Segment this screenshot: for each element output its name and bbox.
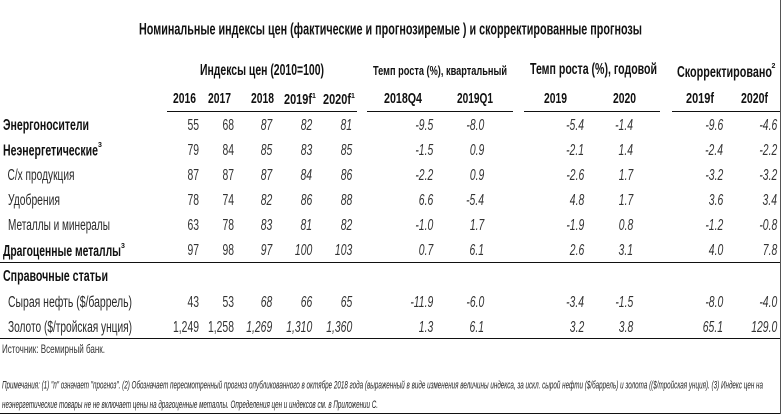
- row: Удобрения: -5.4: [466, 191, 484, 209]
- row: Удобрения: 3.4: [763, 191, 777, 209]
- row: Удобрения: 82: [261, 191, 273, 209]
- row: Неэнергетические: -2.1: [566, 141, 584, 159]
- row: Золото: 65.1: [703, 318, 723, 336]
- column year headers: 2019f: [284, 91, 313, 108]
- row: Удобрения: 74: [222, 191, 234, 209]
- row: Золото: Золото ($/тройская унция): [8, 319, 132, 336]
- row: Металлы и минералы: 83: [261, 216, 273, 234]
- row: Золото: 1,360: [326, 318, 353, 336]
- row: Драгоценные металлы: 103: [335, 241, 353, 259]
- row: С/х продукция: 1.7: [619, 166, 634, 184]
- right border: [780, 0, 781, 414]
- column year headers: 2020f: [741, 90, 769, 107]
- section heading: Справочные статьи: Справочные статьи: [3, 268, 108, 285]
- row: Драгоценные металлы: 6.1: [470, 241, 484, 259]
- column group headings: 2: [772, 63, 776, 70]
- row: Золото: 3.2: [570, 318, 585, 336]
- column year headers: [173, 90, 769, 108]
- row: Драгоценные металлы: 3.1: [619, 241, 633, 259]
- row: Сырая нефть: [8, 293, 778, 311]
- column year headers: 2019f: [686, 90, 715, 107]
- row: Золото: 1,269: [246, 318, 273, 336]
- row: Удобрения: 4.8: [570, 191, 585, 209]
- row: Металлы и минералы: -1.2: [705, 216, 724, 234]
- header rules: [167, 110, 781, 112]
- row: Удобрения: 86: [301, 191, 313, 209]
- row: Неэнергетические: 3: [98, 142, 102, 149]
- row: Удобрения: 78: [187, 191, 199, 209]
- row: Металлы и минералы: -1.9: [566, 216, 585, 234]
- column year headers: 2020f: [323, 91, 352, 108]
- column group headings: Темп роста (%), квартальный: [373, 63, 507, 78]
- row: Золото: 1,258: [208, 318, 234, 336]
- row: Неэнергетические: 0.9: [470, 141, 485, 159]
- row: Энергоносители: -4.6: [759, 116, 778, 134]
- table bottom rule: [0, 338, 781, 340]
- column year headers: 2019Q1: [457, 90, 493, 107]
- row: Энергоносители: -5.4: [566, 116, 584, 134]
- row: Металлы и минералы: Металлы и минералы: [8, 217, 110, 234]
- row: Драгоценные металлы: 100: [295, 241, 313, 259]
- row: Удобрения: Удобрения: [8, 192, 60, 209]
- column year headers: 1: [351, 93, 355, 100]
- row: Энергоносители: -9.6: [705, 116, 724, 134]
- source: Источник: Всемирный банк.: [2, 342, 105, 356]
- row: Драгоценные металлы: 2.6: [569, 241, 585, 259]
- section rule: [0, 262, 781, 264]
- row: С/х продукция: 87: [187, 166, 199, 184]
- row: Сырая нефть: Сырая нефть ($/баррель): [8, 294, 132, 311]
- footnotes: неэнергетические товары не не включает цены на драгоценные металлы. Определения цен и индексов см. в Приложении С.: [2, 399, 378, 411]
- column group headings: Темп роста (%), годовой: [530, 61, 657, 78]
- row: С/х продукция: -3.2: [705, 166, 724, 184]
- column year headers: 2017: [208, 90, 231, 107]
- row: Неэнергетические: [3, 141, 778, 160]
- row: С/х продукция: 84: [300, 166, 312, 184]
- row: Металлы и минералы: -1.0: [415, 216, 434, 234]
- row: Неэнергетические: 85: [261, 141, 273, 159]
- row: Энергоносители: -8.0: [466, 116, 485, 134]
- row: Удобрения: 1.7: [619, 191, 634, 209]
- row: Металлы и минералы: 78: [222, 216, 234, 234]
- row: Металлы и минералы: 1.7: [470, 216, 485, 234]
- row: Драгоценные металлы: 97: [187, 241, 199, 259]
- row: С/х продукция: [8, 166, 778, 184]
- row: Неэнергетические: 84: [222, 141, 234, 159]
- row: Неэнергетические: -1.5: [415, 141, 434, 159]
- row: Золото: 6.1: [470, 318, 484, 336]
- column year headers: 2020: [613, 90, 636, 107]
- row: Сырая нефть: -4.0: [759, 293, 778, 311]
- row: Драгоценные металлы: [3, 241, 778, 260]
- row: Сырая нефть: -11.9: [410, 293, 434, 311]
- row: Сырая нефть: -6.0: [466, 293, 485, 311]
- row: Удобрения: 3.6: [709, 191, 724, 209]
- row: Сырая нефть: 66: [301, 293, 313, 311]
- column group headings: [200, 61, 776, 81]
- row: Неэнергетические: 79: [187, 141, 199, 159]
- row: Сырая нефть: 53: [222, 293, 234, 311]
- column year headers: 2016: [173, 90, 196, 107]
- row: Энергоносители: 55: [187, 116, 199, 134]
- row: С/х продукция: 87: [222, 166, 234, 184]
- row: Энергоносители: 87: [261, 116, 273, 134]
- row: Энергоносители: Энергоносители: [3, 117, 89, 134]
- row: Драгоценные металлы: 7.8: [763, 241, 778, 259]
- row: Сырая нефть: 68: [261, 293, 273, 311]
- row: Удобрения: 88: [341, 191, 353, 209]
- column year headers: 1: [312, 93, 316, 100]
- row: Неэнергетические: Неэнергетические: [3, 142, 98, 160]
- row: Сырая нефть: 65: [341, 293, 353, 311]
- row: Золото: [8, 318, 778, 336]
- row: С/х продукция: 0.9: [470, 166, 485, 184]
- row: Металлы и минералы: 82: [341, 216, 353, 234]
- row: Неэнергетические: -2.4: [705, 141, 723, 159]
- row: Драгоценные металлы: 98: [222, 241, 234, 259]
- row: Золото: 1.3: [419, 318, 434, 336]
- column year headers: 2018Q4: [384, 90, 422, 107]
- row: Энергоносители: 82: [301, 116, 313, 134]
- row: Энергоносители: [3, 116, 778, 134]
- column year headers: 2019: [544, 90, 567, 107]
- row: Энергоносители: -1.4: [615, 116, 633, 134]
- row: Неэнергетические: 1.4: [619, 141, 633, 159]
- column group headings: Индексы цен (2010=100): [200, 62, 324, 79]
- row: С/х продукция: 86: [341, 166, 353, 184]
- row: Сырая нефть: -3.4: [566, 293, 584, 311]
- row: Драгоценные металлы: 0.7: [419, 241, 434, 259]
- row: Энергоносители: -9.5: [415, 116, 434, 134]
- column year headers: 2018: [251, 90, 274, 107]
- row: Удобрения: 6.6: [419, 191, 434, 209]
- row: Драгоценные металлы: 97: [261, 241, 273, 259]
- row: Неэнергетические: 83: [301, 141, 313, 159]
- row: Золото: 129.0: [751, 318, 778, 336]
- row: Металлы и минералы: [8, 216, 778, 234]
- row: Энергоносители: 81: [340, 116, 352, 134]
- row: Металлы и минералы: 63: [187, 216, 199, 234]
- row: Удобрения: [8, 191, 777, 209]
- row: Драгоценные металлы: 4.0: [709, 241, 724, 259]
- row: Металлы и минералы: 81: [300, 216, 312, 234]
- row: Золото: 1,249: [173, 318, 199, 336]
- row: С/х продукция: 87: [261, 166, 273, 184]
- row: С/х продукция: -2.6: [566, 166, 585, 184]
- row: Неэнергетические: 85: [341, 141, 353, 159]
- row: Сырая нефть: -1.5: [615, 293, 634, 311]
- row: Энергоносители: 68: [222, 116, 234, 134]
- footnotes: [2, 380, 763, 411]
- row: Драгоценные металлы: 3: [121, 243, 125, 250]
- row: Металлы и минералы: 0.8: [619, 216, 634, 234]
- row: Металлы и минералы: -0.8: [759, 216, 778, 234]
- row: Сырая нефть: 43: [187, 293, 199, 311]
- row: С/х продукция: С/х продукция: [8, 167, 74, 184]
- row: Сырая нефть: -8.0: [705, 293, 724, 311]
- row: Неэнергетические: -2.2: [759, 141, 778, 159]
- page bottom rule: [0, 412, 781, 414]
- row: Золото: 1,310: [286, 318, 313, 336]
- row: С/х продукция: -3.2: [759, 166, 778, 184]
- row: Драгоценные металлы: Драгоценные металлы: [3, 243, 121, 260]
- row: С/х продукция: -2.2: [415, 166, 434, 184]
- row: Золото: 3.8: [619, 318, 634, 336]
